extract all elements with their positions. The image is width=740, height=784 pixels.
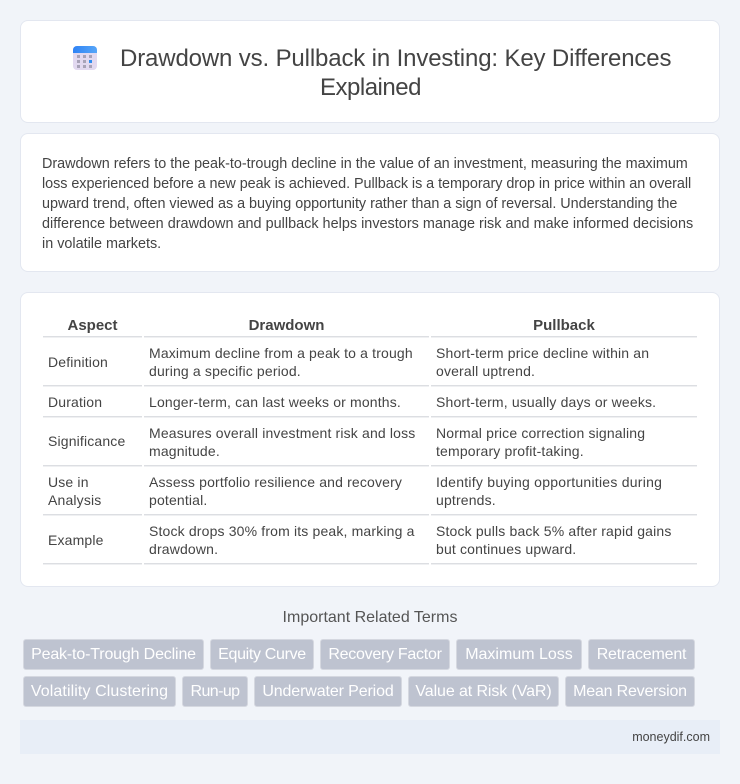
text block: intro: difference between drawdown and pullback helps investors manage risk and make informed decisions bbox=[42, 216, 693, 232]
panel: comparison table: during a specific period. bbox=[149, 363, 301, 379]
panel: comparison table: Normal price correction signaling bbox=[436, 425, 645, 441]
icon: calendar bbox=[73, 46, 97, 70]
panel: comparison table: Assess portfolio resilience and recovery bbox=[149, 474, 402, 490]
text: Peak-to-Trough Decline bbox=[31, 646, 196, 663]
text: Mean Reversion bbox=[573, 683, 687, 700]
text block: intro: in volatile markets. bbox=[42, 236, 161, 252]
footer text: moneydif.com bbox=[632, 730, 710, 744]
panel: comparison table: Aspect bbox=[67, 317, 118, 334]
text: Recovery Factor bbox=[328, 646, 442, 663]
title: Explained bbox=[320, 74, 421, 101]
panel: comparison table: uptrends. bbox=[436, 492, 496, 508]
text block: intro: upward trend, often viewed as a buying opportunity rather than a sign of reversal. Understanding the bbox=[42, 196, 677, 212]
row: use in analysis bbox=[48, 474, 662, 508]
panel: comparison table: overall uptrend. bbox=[436, 363, 535, 379]
row: definition bbox=[48, 345, 649, 379]
text: Run-up bbox=[191, 683, 239, 700]
text: Retracement bbox=[597, 646, 686, 663]
panel: comparison table: Use in bbox=[48, 474, 89, 490]
panel: comparison table: potential. bbox=[149, 492, 207, 508]
text: Equity Curve bbox=[218, 646, 306, 663]
title: Drawdown vs. Pullback in Investing: Key Differences bbox=[120, 45, 671, 72]
panel: comparison table: Pullback bbox=[533, 317, 595, 334]
panel: comparison table: Longer-term, can last weeks or months. bbox=[149, 394, 401, 410]
row: duration bbox=[48, 394, 656, 410]
panel: comparison table: Significance bbox=[48, 433, 125, 449]
panel: comparison table: Measures overall investment risk and loss bbox=[149, 425, 415, 441]
table header bbox=[67, 317, 595, 334]
panel: comparison table: Analysis bbox=[48, 492, 101, 508]
panel: comparison table: magnitude. bbox=[149, 443, 220, 459]
text block: intro: Drawdown refers to the peak-to-trough decline in the value of an investment, measuring the maximum bbox=[42, 156, 688, 172]
panel: comparison table bbox=[20, 292, 720, 587]
title bbox=[120, 45, 671, 101]
panel: comparison table: Drawdown bbox=[249, 317, 324, 334]
heading: related terms: Important Related Terms bbox=[283, 609, 457, 626]
tags: related terms bbox=[23, 639, 695, 707]
text block: intro: loss experienced before a new peak is achieved. Pullback is a temporary drop in price within an overall bbox=[42, 176, 691, 192]
panel: comparison table: Stock pulls back 5% after rapid gains bbox=[436, 523, 671, 539]
panel: comparison table: Duration bbox=[48, 394, 102, 410]
panel: title card bbox=[20, 20, 720, 123]
text: Volatility Clustering bbox=[31, 683, 168, 700]
panel: comparison table: Stock drops 30% from its peak, marking a bbox=[149, 523, 415, 539]
text: Underwater Period bbox=[262, 683, 394, 700]
panel: comparison table: Short-term price decline within an bbox=[436, 345, 649, 361]
panel: comparison table: Identify buying opportunities during bbox=[436, 474, 662, 490]
row: significance bbox=[48, 425, 645, 459]
panel: comparison table: temporary profit-taking. bbox=[436, 443, 584, 459]
panel: comparison table: Example bbox=[48, 532, 104, 548]
panel: intro paragraph bbox=[20, 133, 720, 272]
panel: comparison table: but continues upward. bbox=[436, 541, 576, 557]
text: Maximum Loss bbox=[465, 646, 573, 663]
panel: comparison table: Short-term, usually days or weeks. bbox=[436, 394, 656, 410]
panel: comparison table: Definition bbox=[48, 354, 108, 370]
text block: intro bbox=[42, 156, 693, 252]
text: Value at Risk (VaR) bbox=[415, 683, 552, 700]
row: example bbox=[48, 523, 671, 557]
panel: comparison table: Maximum decline from a peak to a trough bbox=[149, 345, 413, 361]
panel: comparison table: drawdown. bbox=[149, 541, 218, 557]
footer bar bbox=[20, 720, 720, 754]
